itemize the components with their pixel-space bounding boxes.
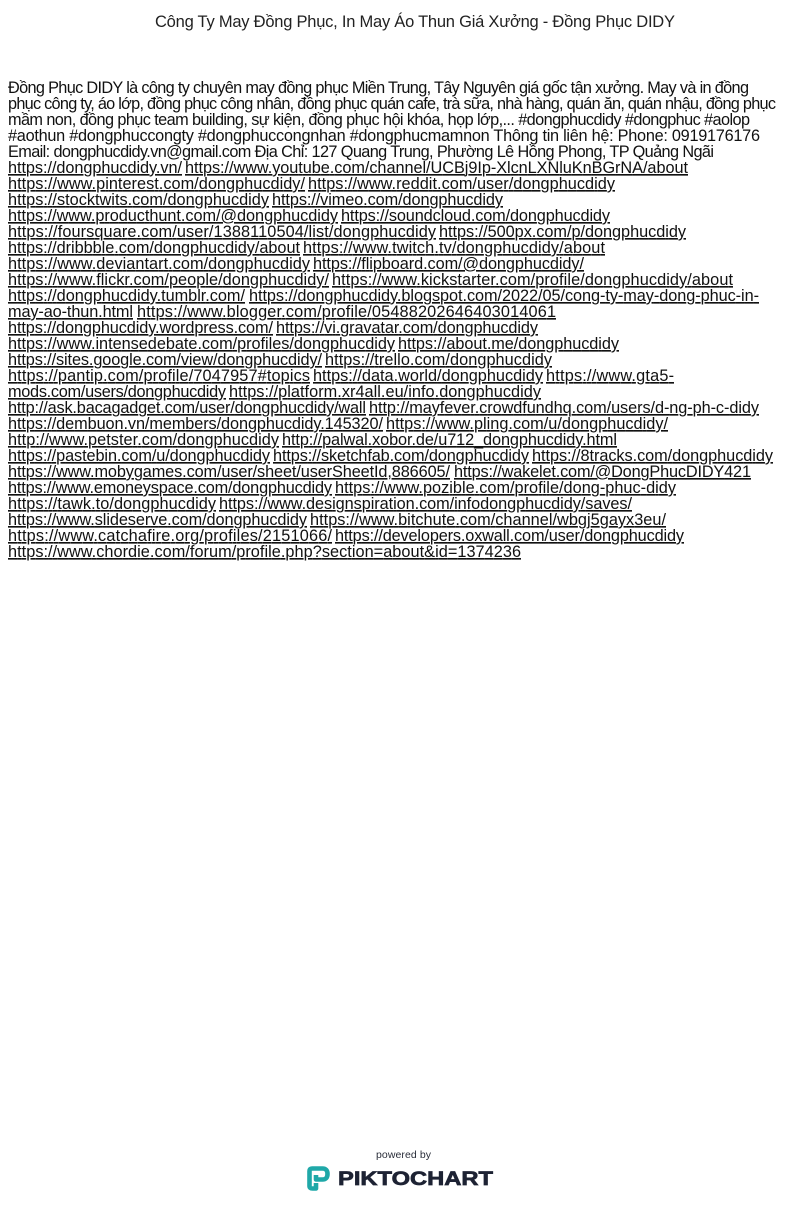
text block: list of links: https://500px.com/p/dongphucdidy [439,223,687,241]
text block: list of links: https://about.me/dongphucdidy [398,335,620,353]
text block: company description: mầm non, đồng phục team building, sự kiện, đồng phục hội khóa, họp lớp,... #dongphucdidy #dongphuc #aolop [8,111,750,129]
text block: list of links: https://www.mobygames.com/user/sheet/userSheetId,886605/ [8,463,450,481]
text block: company description [8,79,776,161]
text block: list of links: https://flipboard.com/@dongphucdidy/ [313,255,584,273]
text block: list of links: https://www.pinterest.com/dongphucdidy/ [8,175,305,193]
text block: list of links: https://www.slideserve.com/dongphucdidy [8,511,308,529]
text block: list of links: https://dongphucdidy.wordpress.com/ [8,319,273,337]
text block: list of links: https://sites.google.com/view/dongphucdidy/ [8,351,322,369]
text block: list of links: https://dribbble.com/dongphucdidy/about [8,239,300,257]
text block: list of links: https://wakelet.com/@DongPhucDIDY421 [454,463,751,481]
Piktochart wordmark: PIKTOCHART [338,1168,493,1190]
text block: list of links: https://www.blogger.com/profile/05488202646403014061 [137,303,556,321]
text block: list of links: https://www.intensedebate.com/profiles/dongphucdidy [8,335,396,353]
text block: list of links: https://www.pozible.com/profile/dong-phuc-didy [335,479,677,497]
text block: company description: Email: dongphucdidy.vn@gmail.com Địa Chỉ: 127 Quang Trung, Phường Lê Hồng Phong, TP Quảng Ngãi [8,143,714,161]
text block: list of links: https://www.reddit.com/user/dongphucdidy [308,175,616,193]
text block: list of links: http://www.petster.com/dongphucdidy [8,431,280,449]
text block: list of links: https://www.flickr.com/people/dongphucdidy/ [8,271,329,289]
text block: list of links: https://dongphucdidy.vn/ [8,159,182,177]
footer: powered by Piktochart [310,1149,493,1190]
text block: list of links: https://www.twitch.tv/dongphucdidy/about [303,239,605,257]
text block: list of links: http://palwal.xobor.de/u712_dongphucdidy.html [282,431,617,449]
text block: list of links: https://www.emoneyspace.com/dongphucdidy [8,479,333,497]
text block: list of links: http://ask.bacagadget.com/user/dongphucdidy/wall [8,399,366,417]
text block: company description: #aothun #dongphuccongty #dongphuccongnhan #dongphucmamnon Thông tin liên hệ: Phone: 0919176176 [8,127,760,145]
text block: list of links: https://www.pling.com/u/dongphucdidy/ [386,415,668,433]
text block: list of links: https://www.gta5- [546,367,674,385]
text block: list of links: https://www.producthunt.com/@dongphucdidy [8,207,339,225]
text block: list of links: https://platform.xr4all.eu/info.dongphucdidy [229,383,542,401]
text block: list of links: https://trello.com/dongphucdidy [325,351,553,369]
title: Công Ty May Đồng Phục, In May Áo Thun Giá Xưởng - Đồng Phục DIDY [155,12,675,31]
powered by label: powered by [376,1149,432,1161]
text block: list of links [8,159,774,561]
text block: list of links: https://www.chordie.com/forum/profile.php?section=about&id=1374236 [8,543,521,561]
text block: list of links: https://www.kickstarter.com/profile/dongphucdidy/about [332,271,733,289]
text block: list of links: https://developers.oxwall.com/user/dongphucdidy [335,527,685,545]
text block: company description: Đồng Phục DIDY là công ty chuyên may đồng phục Miền Trung, Tây Nguyên giá gốc tận xưởng. May và in đồng [8,79,749,97]
text block: list of links: https://stocktwits.com/dongphucdidy [8,191,270,209]
text block: list of links: https://data.world/dongphucdidy [313,367,544,385]
text block: list of links: https://soundcloud.com/dongphucdidy [341,207,611,225]
icon: Piktochart logo mark [310,1168,328,1188]
text block: list of links: https://vi.gravatar.com/dongphucdidy [276,319,539,337]
text block: list of links: may-ao-thun.html [8,303,133,321]
text block: company description: phục công ty, áo lớp, đồng phục công nhân, đồng phục quán cafe, trà sữa, nhà hàng, quán ăn, quán nhậu, đồng phục [8,95,776,113]
text block: list of links: https://dembuon.vn/members/dongphucdidy.145320/ [8,415,383,433]
text block: list of links: mods.com/users/dongphucdidy [8,383,227,401]
text block: list of links: http://mayfever.crowdfundhq.com/users/d-ng-ph-c-didy [369,399,760,417]
text block: list of links: https://pantip.com/profile/7047957#topics [8,367,310,385]
text block: list of links: https://foursquare.com/user/1388110504/list/dongphucdidy [8,223,437,241]
text block: list of links: https://www.catchafire.org/profiles/2151066/ [8,527,332,545]
text block: list of links: https://dongphucdidy.tumblr.com/ [8,287,245,305]
text block: list of links: https://8tracks.com/dongphucdidy [532,447,774,465]
text block: list of links: https://www.deviantart.com/dongphucdidy [8,255,311,273]
text block: list of links: https://vimeo.com/dongphucdidy [272,191,504,209]
text block: list of links: https://sketchfab.com/dongphucdidy [273,447,530,465]
text block: list of links: https://dongphucdidy.blogspot.com/2022/05/cong-ty-may-dong-phuc-in- [249,287,759,305]
text block: list of links: https://www.designspiration.com/infodongphucdidy/saves/ [219,495,632,513]
text block: list of links: https://www.youtube.com/channel/UCBj9Ip-XlcnLXNluKnBGrNA/about [185,159,688,177]
text block: list of links: https://www.bitchute.com/channel/wbgj5gayx3eu/ [310,511,666,529]
text block: list of links: https://pastebin.com/u/dongphucdidy [8,447,271,465]
text block: list of links: https://tawk.to/dongphucdidy [8,495,217,513]
